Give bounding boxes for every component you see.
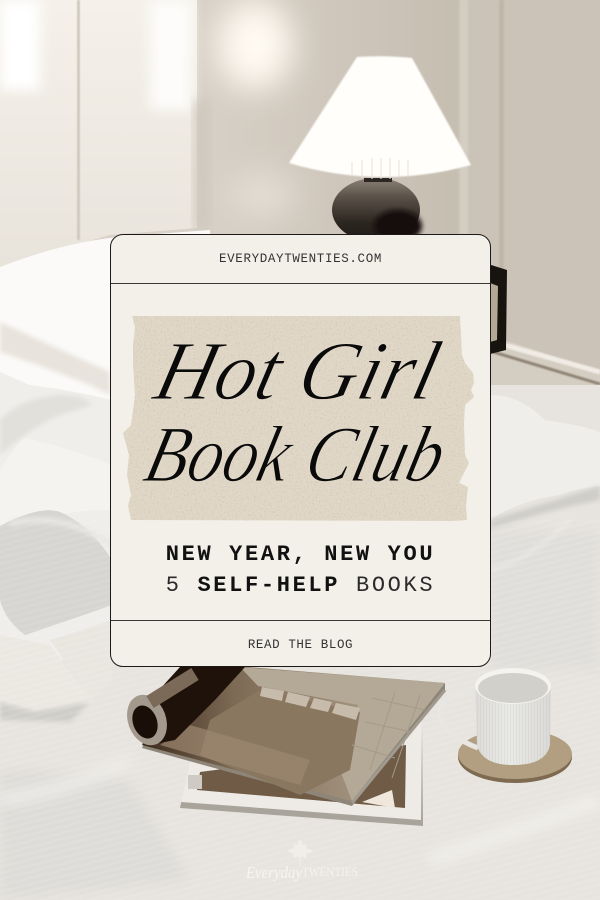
lamp shade pleats (352, 158, 408, 179)
bed (0, 230, 600, 900)
lamp base (332, 178, 422, 242)
call to action: READ THE BLOG (248, 638, 353, 652)
logo text: Everyday (245, 863, 302, 882)
headline (166, 542, 435, 598)
torn paper title block (123, 316, 474, 521)
lamp shade (289, 56, 471, 177)
right pillow (490, 395, 600, 520)
script title: Hot Girl: Hot Girl (145, 325, 449, 418)
curtain (0, 0, 209, 267)
script title: Book Club: Book Club (137, 410, 455, 499)
mug (440, 668, 551, 765)
magazine roll (120, 689, 174, 751)
headline line two: 5 SELF-HELP BOOKS (166, 573, 435, 598)
website label: EVERYDAYTWENTIES.COM (219, 252, 382, 266)
rumpled duvet (0, 372, 112, 660)
palm icon (288, 840, 312, 866)
wall (0, 0, 600, 430)
headline line one: NEW YEAR, NEW YOU (166, 542, 435, 567)
coaster (458, 729, 572, 783)
wall panel trim (458, 0, 600, 430)
footer logo: TWENTIES (302, 865, 358, 879)
card panel (110, 234, 491, 667)
upper magazine (120, 667, 445, 806)
torn paper (123, 316, 474, 521)
lower magazine (180, 722, 423, 826)
black box behind card (488, 264, 507, 354)
wall glow (217, 0, 293, 90)
footer logo (245, 840, 358, 882)
left pillow (0, 230, 220, 420)
